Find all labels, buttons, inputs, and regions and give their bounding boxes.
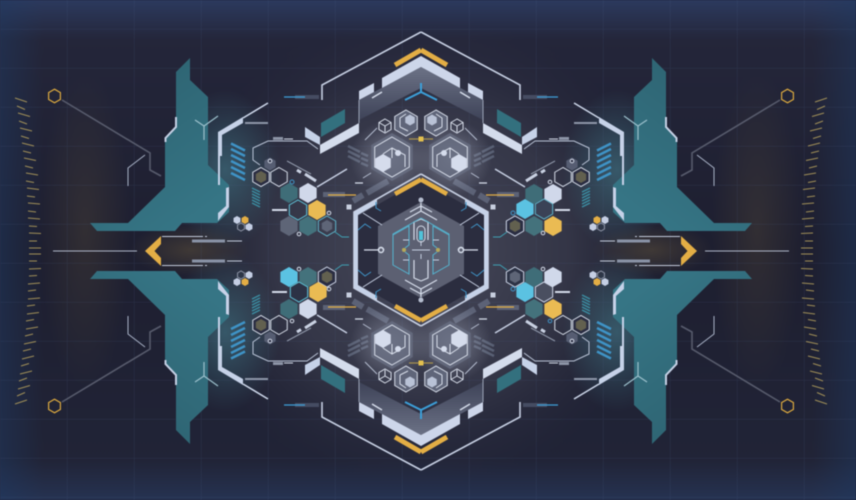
diagonal inner line [363,213,382,225]
grey and gold bar [323,192,356,197]
central grey hex [378,202,421,250]
outline hexes [253,168,287,186]
top node [418,198,424,202]
side ruler ticks [15,98,41,248]
hex cluster top-left [280,180,336,236]
teal panel [321,109,345,137]
small bars on band [372,92,382,98]
central hex dark backing [356,180,421,250]
top light block [359,83,374,100]
bottom-right quadrant mirror [412,251,827,470]
blue stripes [231,144,245,180]
top light band [382,56,421,88]
top grey band [359,67,421,120]
central mirror right [418,174,488,282]
medium hex icon [395,110,417,136]
central hexagon quadrant [354,174,424,282]
bottom-left quadrant mirror [15,251,430,470]
hex cluster bottom-left [280,267,336,323]
central yellow node [402,248,406,252]
central gold chevron [395,180,421,194]
icon: gold outline hexagon [49,89,60,103]
central crosshair [403,240,421,250]
thin diagonals [363,128,377,178]
teal small stripes [252,188,260,207]
teal wing [90,58,229,231]
top-right quadrant mirror [412,32,827,251]
bands near central hex [353,181,388,201]
hex cluster bottom-right [506,267,562,323]
blue Y glyph [405,83,421,100]
diagonal circuit line with blocks [287,161,347,187]
central outline [354,174,421,250]
central mirror lower right [418,218,488,326]
central mirror lower left [354,218,424,326]
grey short bar [245,122,268,124]
small grey hex [264,158,276,170]
wing light blocks [305,100,359,154]
central Y glyph [405,203,421,220]
white square [346,204,352,210]
wing edge highlight [166,117,176,142]
outer top line [322,32,421,100]
connector with node [364,248,384,252]
central white bracket [414,219,421,240]
blue corner accent [358,202,381,230]
central light band [354,199,377,250]
central cyan pill [417,226,425,242]
teal tail line [335,232,349,237]
gold chevron [145,236,161,251]
short lines beside chevron [162,236,242,242]
central cyan circuit [393,226,421,282]
Y glyph on wing [195,116,218,140]
long horizontal line [53,250,137,252]
top-left quadrant of HUD [15,32,430,251]
white short bar [272,209,287,211]
frame band lower [218,187,229,221]
grey diagonal stripes [348,146,368,166]
circuit frame [253,137,318,165]
hex cluster top-right [506,180,562,236]
small hex cluster [234,216,252,231]
gold connector [409,136,424,142]
top gold chevron [395,50,421,65]
blue dash with grey bar [284,95,319,99]
small cube hex [379,119,391,133]
large hex icon [371,133,413,181]
thin bracket line [128,155,145,186]
glow behind large hex [350,120,430,196]
frame band upper [218,103,268,185]
connector line [62,100,161,176]
